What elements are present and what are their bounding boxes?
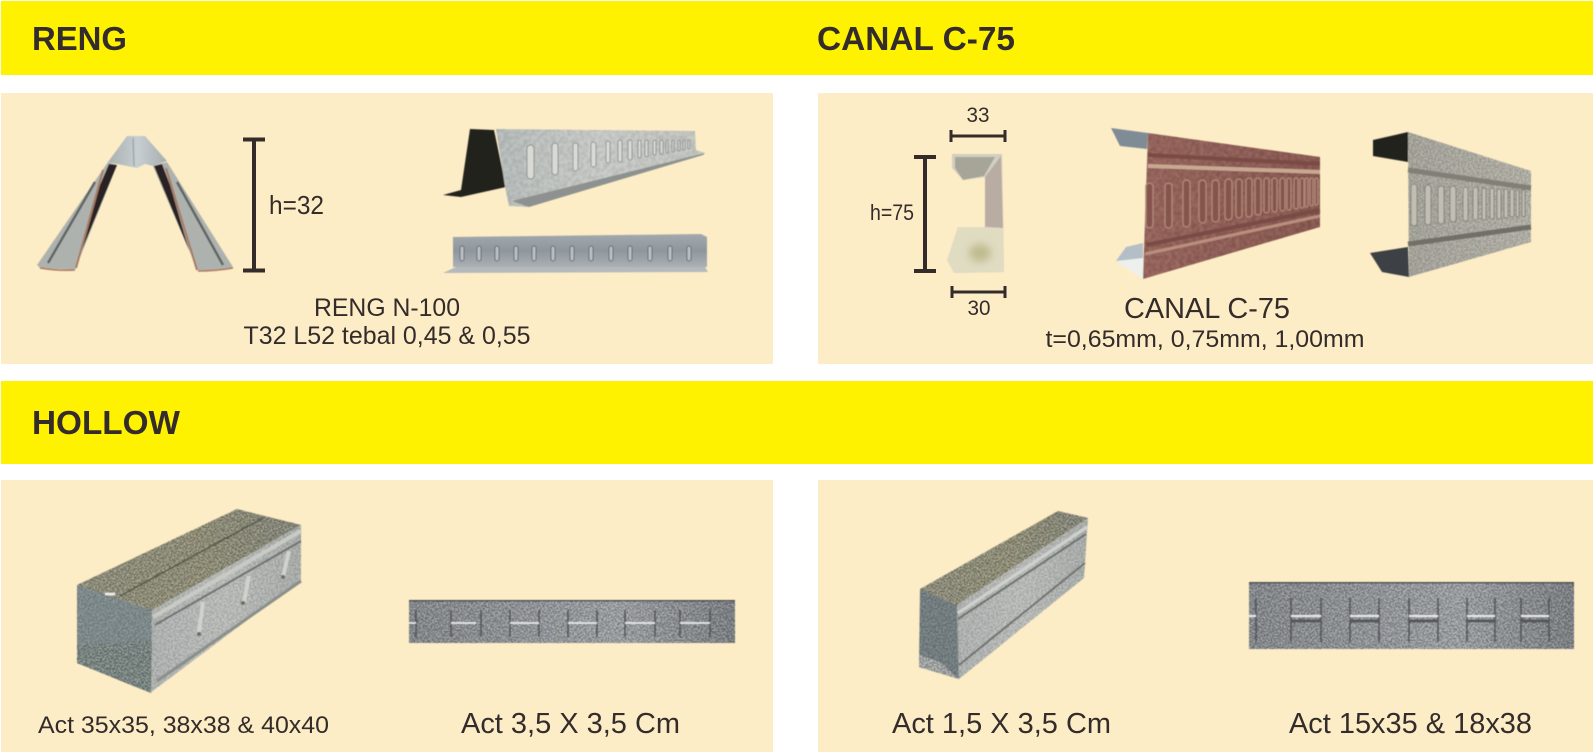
panel: Canal C-75 [818, 93, 1593, 364]
icon: embossed strip 1,5 [1249, 582, 1574, 649]
dimension: h=32: h=32 [269, 190, 324, 220]
caption: Act 3,5 X 3,5 Cm: Act 3,5 X 3,5 Cm [461, 708, 680, 740]
icon: reng side view [443, 234, 708, 273]
heading: HOLLOW: HOLLOW [32, 404, 181, 441]
dimension: width 33: 33 [966, 104, 990, 127]
dimension: width 33 [951, 104, 1005, 142]
header band: Hollow [1, 381, 1593, 464]
caption: Act 1,5 X 3,5 Cm: Act 1,5 X 3,5 Cm [892, 708, 1111, 740]
icon: embossed strip 3,5 [409, 600, 735, 643]
icon: large hollow section [77, 509, 301, 693]
caption: Reng specification [244, 294, 530, 350]
icon: canal end profile [947, 154, 1004, 273]
heading: CANAL C-75: CANAL C-75 [817, 20, 1015, 57]
caption: Act 35x35: Act 35x35, 38x38 & 40x40 [38, 712, 329, 739]
icon: galvanized canal [1370, 132, 1531, 277]
heading: RENG: RENG [32, 20, 127, 57]
panel: Hollow 35 [1, 480, 773, 752]
dimension: h=32 [243, 139, 324, 271]
caption: Canal thickness: t=0,65mm, 0,75mm, 1,00mm [1046, 326, 1364, 353]
caption: Canal thickness [1046, 293, 1364, 353]
header band: Reng and Canal C-75 [1, 1, 1593, 75]
dimension: width 30 [952, 286, 1005, 320]
icon: red-brown canal [1111, 128, 1320, 279]
icon: small hollow section [919, 511, 1088, 679]
panel: Hollow 15 [818, 480, 1593, 752]
caption: Reng specification: RENG N-100 [314, 294, 460, 322]
icon: reng end profile [37, 136, 233, 271]
dimension: h=75 [870, 157, 936, 271]
caption: Canal thickness: CANAL C-75 [1124, 293, 1290, 325]
caption: Act 15x35 and 18x38: Act 15x35 & 18x38 [1289, 708, 1532, 740]
caption: Reng specification: T32 L52 tebal 0,45 & 0,55 [244, 322, 530, 350]
dimension: width 30: 30 [968, 297, 990, 320]
panel: Reng [1, 93, 773, 364]
dimension: h=75: h=75 [870, 200, 914, 225]
icon: reng perspective view [443, 129, 705, 207]
